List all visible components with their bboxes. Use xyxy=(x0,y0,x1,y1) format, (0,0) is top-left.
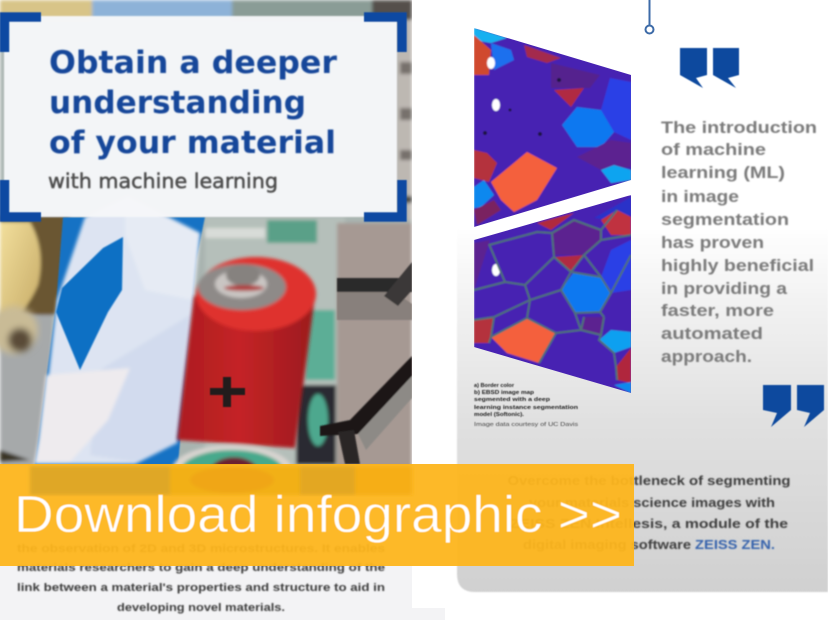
icy blue inclusion xyxy=(56,237,123,370)
icon: closing quote marks xyxy=(763,385,824,427)
title: corner brackets xyxy=(4,17,402,217)
call to action text: Overcome the bottleneck of segmenting xyxy=(508,474,790,488)
call to action text xyxy=(508,474,790,552)
call to action text: digital imaging software ZEISS ZEN. xyxy=(523,538,775,552)
icy crystal sample xyxy=(34,196,200,464)
image caption: learning instance segmentation xyxy=(474,405,579,411)
quote text: segmentation xyxy=(661,210,789,229)
quote text: The introduction xyxy=(661,118,817,137)
grain image: top original xyxy=(474,28,632,228)
connector line with circle xyxy=(646,0,654,34)
image caption: b) EBSD image map xyxy=(474,390,535,396)
heading xyxy=(49,45,338,161)
image caption: a) Border color xyxy=(474,383,515,389)
battery xyxy=(172,257,316,495)
quote text: highly beneficial xyxy=(661,256,814,275)
quote text: in image xyxy=(661,187,739,206)
image caption: segmented with a deep xyxy=(474,397,551,403)
intro paragraph xyxy=(17,543,385,614)
intro paragraph: link between a material's properties and structure to aid in xyxy=(17,582,385,594)
heading: understanding xyxy=(49,85,306,121)
image caption: Image data courtesy of UC Davis xyxy=(474,422,578,428)
panel: grey quote panel xyxy=(457,0,828,592)
banner text: Download infographic >> xyxy=(14,486,622,544)
quote text: approach. xyxy=(661,347,752,366)
hexagonal metal structure xyxy=(320,262,412,464)
image caption: model (Softonic). xyxy=(474,412,525,418)
quote text: automated xyxy=(661,324,763,343)
quote text: has proven xyxy=(661,233,764,252)
heading: Obtain a deeper xyxy=(49,45,338,81)
banner: photo showing through xyxy=(30,466,412,495)
quote text: of machine xyxy=(661,140,766,159)
image caption xyxy=(474,383,579,428)
grain image: bottom segmented xyxy=(474,195,632,395)
quote text: in providing a xyxy=(661,279,788,298)
icon: opening quote marks xyxy=(680,48,739,88)
battery plus sign xyxy=(210,377,245,407)
subheading: with machine learning xyxy=(48,169,278,193)
banner: download infographic xyxy=(0,464,634,566)
quote text: learning (ML) xyxy=(661,163,785,182)
intro paragraph: materials researchers to gain a deep understanding of the xyxy=(17,562,385,574)
title box xyxy=(4,16,402,217)
intro paragraph: developing novel materials. xyxy=(117,602,285,614)
mineral grain shadow xyxy=(0,306,38,354)
quote text xyxy=(661,118,817,366)
call to action text: ZEISS ZEN Intellesis, a module of the xyxy=(510,517,788,531)
heading: of your material xyxy=(49,125,336,161)
quote text: faster, more xyxy=(661,301,774,320)
panel: bottom intro text background xyxy=(0,465,412,620)
intro paragraph: the observation of 2D and 3D microstructures. It enables xyxy=(17,543,385,555)
blue backing xyxy=(35,217,205,465)
panel: materials photo collage xyxy=(0,0,412,495)
call to action text: your materials science images with xyxy=(529,496,775,510)
